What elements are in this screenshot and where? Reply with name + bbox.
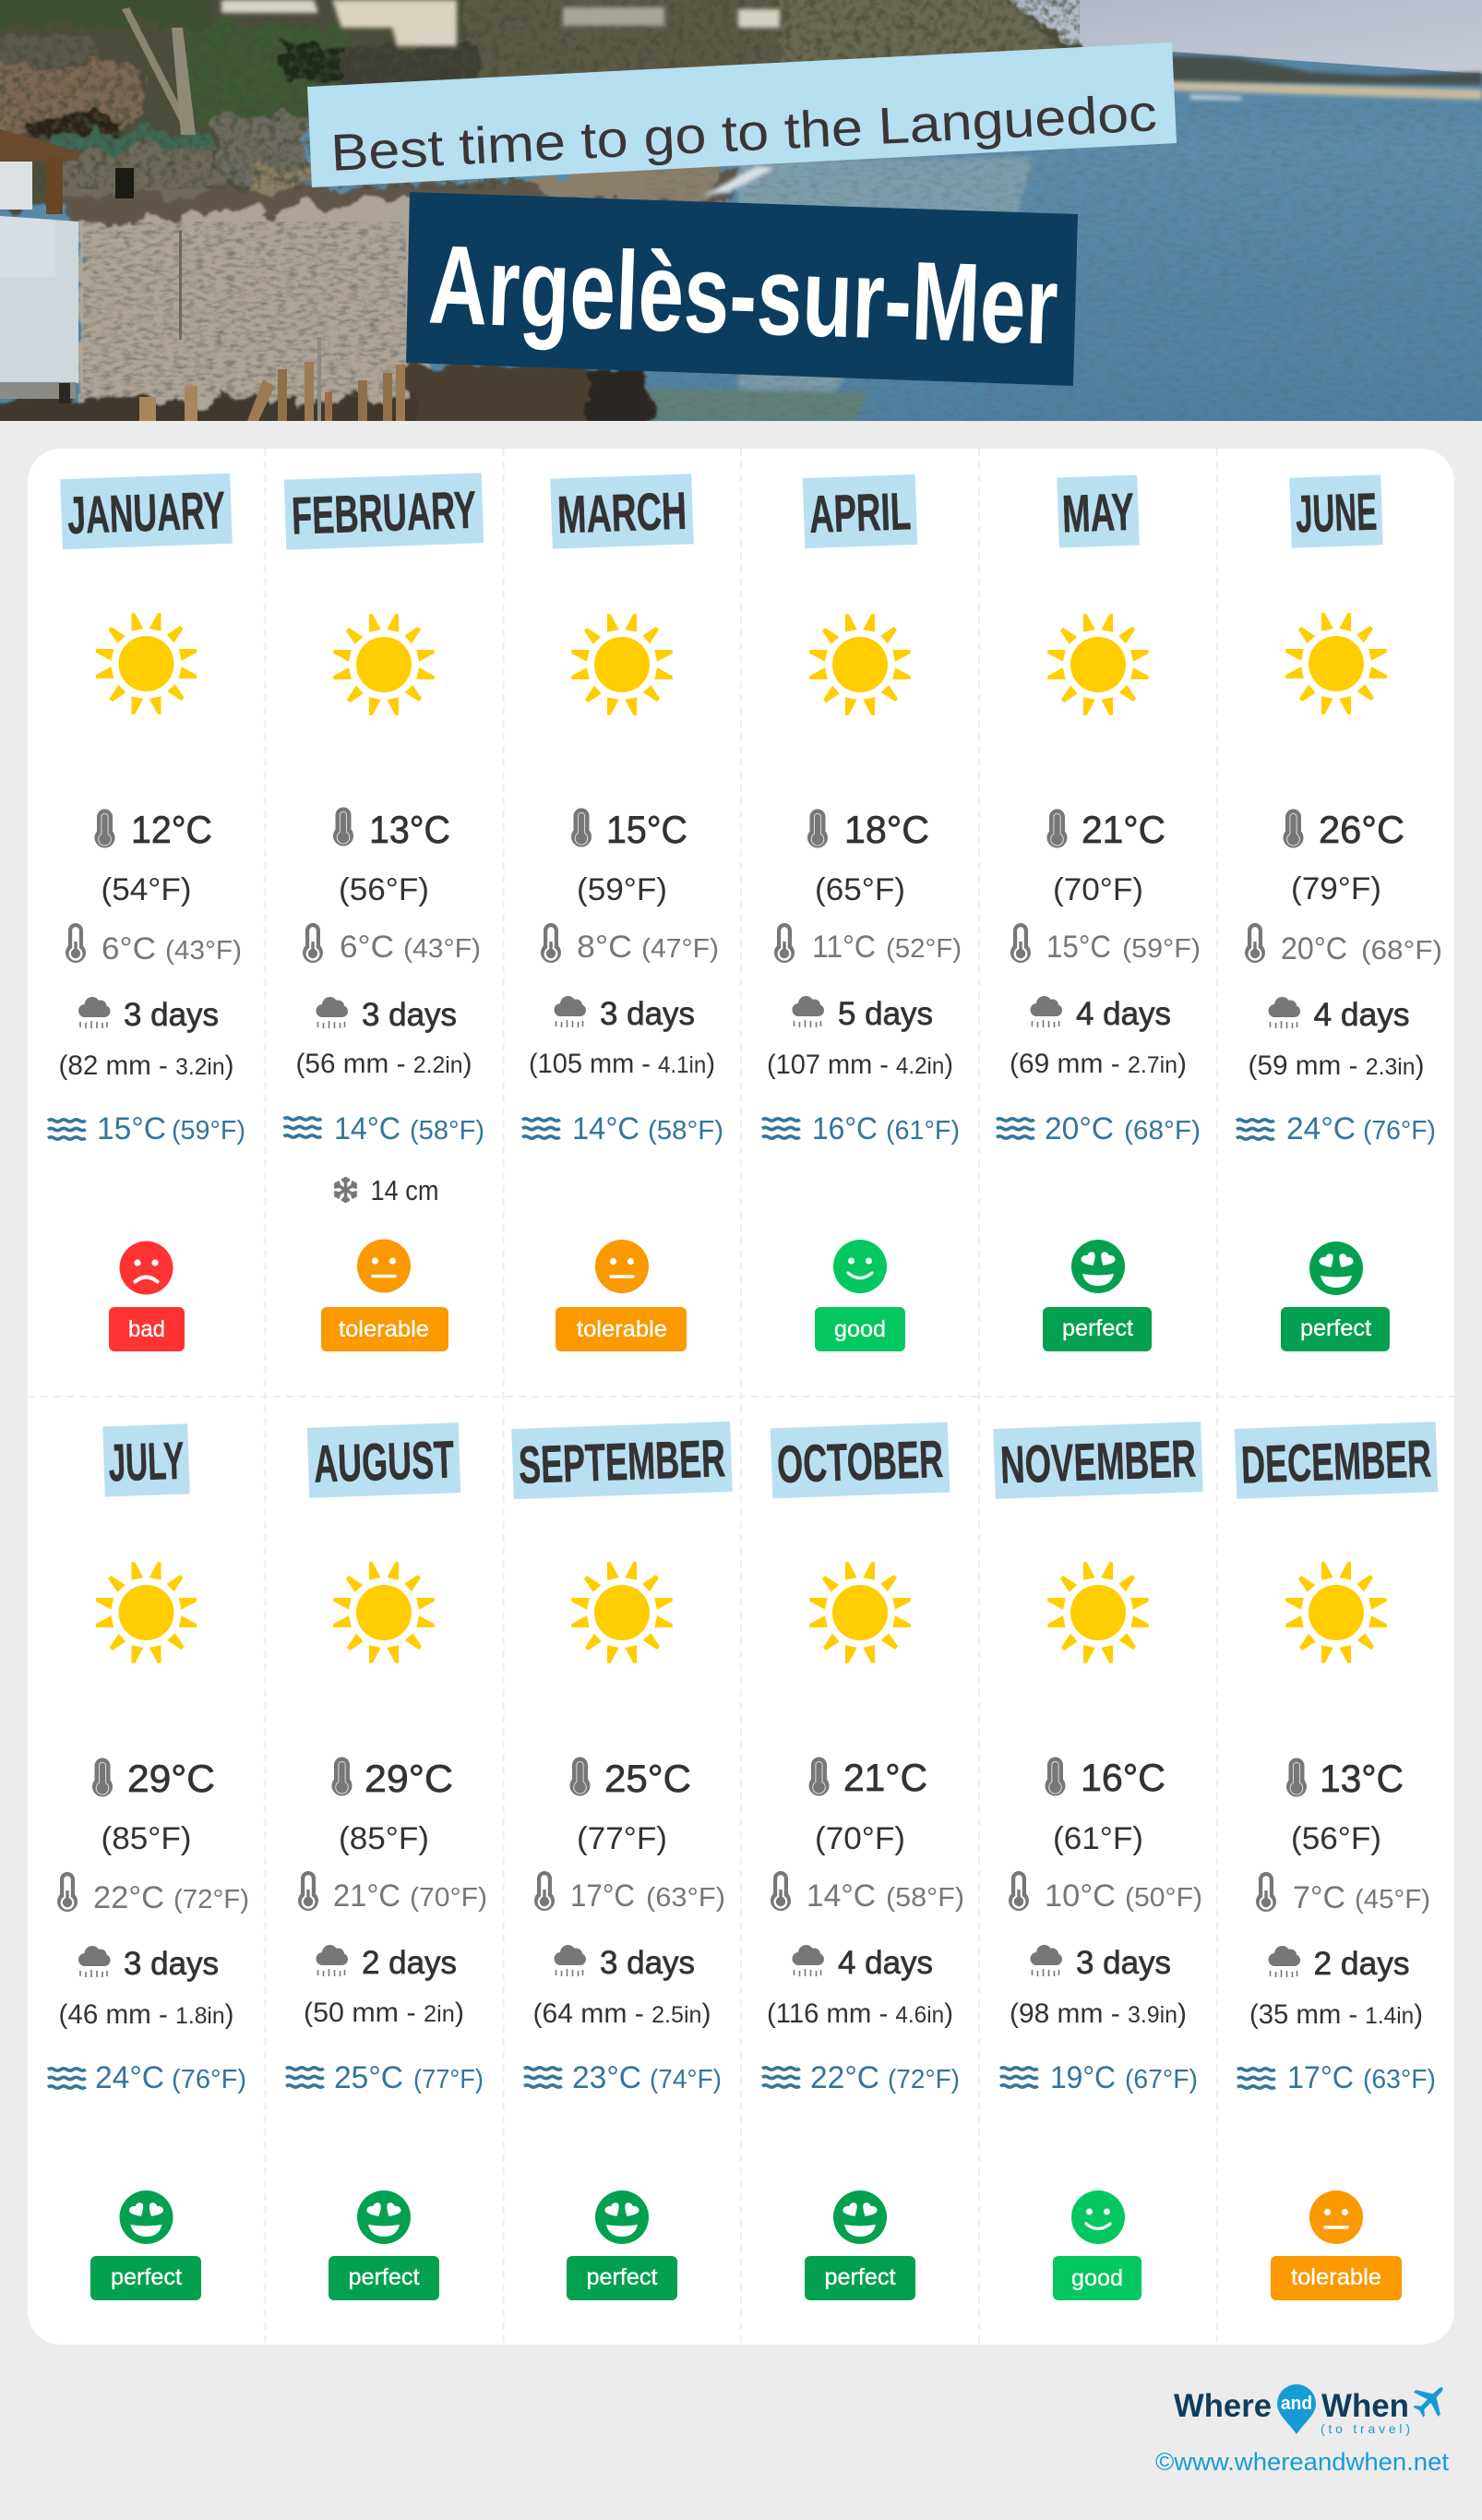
icon: sun [571,614,673,715]
icon: heart-eyes face [357,2190,411,2244]
low temperature: (58°F) [886,1883,964,1913]
logo: Where and When: (to travel) [1321,2421,1410,2436]
rain days: 2 days [1314,1946,1410,1982]
rating: perfect: perfect [587,2264,658,2290]
logo: Where and When: When [1321,2388,1409,2424]
rainfall: (69 mm - 2.7in) [1010,1049,1187,1079]
low temperature: 7°C [1293,1880,1345,1915]
month: June [1237,474,1442,1351]
month label [102,1423,190,1497]
low temperature: 6°C [102,931,156,966]
icon: heart-eyes face [595,2190,649,2244]
rainfall: (56 mm - 2.2in) [295,1049,472,1079]
city name banner: Argelès-sur-Mer [426,221,1060,368]
low temperature: (50°F) [1125,1883,1202,1913]
high temperature Fahrenheit: (56°F) [339,872,429,907]
sea temperature [334,1111,484,1146]
high temperature Fahrenheit: (61°F) [1053,1821,1143,1856]
rating: perfect [1043,1307,1152,1351]
icon: low thermometer [1256,1872,1276,1912]
icon: heart-eyes face [120,2190,173,2244]
low temperature: 11°C [812,930,876,965]
icon: low thermometer [1009,1871,1029,1911]
icon: sun [1285,1562,1387,1663]
rainfall: (98 mm - 3.9in) [1010,1998,1187,2029]
month: September [511,1422,733,2300]
high temperature: 25°C [604,1757,691,1800]
month label [511,1422,733,1499]
sea temperature [812,1111,960,1146]
icon: thermometer [94,809,114,847]
high temperature Fahrenheit: (65°F) [815,872,905,907]
icon: rain cloud [78,1946,111,1977]
low temperature: (72°F) [173,1885,249,1914]
icon: rain cloud [316,997,348,1028]
icon: rain cloud [1268,997,1300,1028]
month: March [522,474,723,1351]
icon: rain cloud [554,1945,586,1976]
sea temperature: (67°F) [1125,2065,1198,2094]
high temperature Fahrenheit: (54°F) [102,872,192,907]
month label: MARCH [556,482,687,545]
rating: perfect [329,2256,439,2300]
sea temperature [95,2060,246,2095]
title banner: Best time to go to the Languedoc [329,83,1158,182]
icon: rain cloud [1030,1945,1062,1976]
low temperature: (43°F) [403,934,481,964]
rating: tolerable: tolerable [339,1316,429,1342]
low temperature: (43°F) [165,936,242,966]
icon: waves [762,2068,800,2087]
icon: heart-eyes face [833,2190,887,2244]
icon: thermometer [1286,1758,1307,1796]
rain days: 3 days [600,996,695,1032]
icon: neutral face [595,1240,649,1293]
icon: thermometer [1046,809,1067,847]
rating: bad [109,1307,185,1351]
icon: waves [1237,1120,1274,1139]
sea temperature: (58°F) [410,1116,484,1146]
icon: smiling face [833,1240,887,1293]
low temperature [1293,1880,1430,1915]
low temperature: 8°C [577,930,632,965]
high temperature Fahrenheit: (56°F) [1291,1821,1381,1856]
icon: plane [1406,2376,1454,2424]
low temperature [333,1878,487,1914]
low temperature [570,1878,725,1914]
logo: Where and When [1174,2376,1454,2436]
rain days: 4 days [1314,997,1410,1033]
rainfall: (50 mm - 2in) [304,1998,464,2028]
rainfall: (107 mm - 4.2in) [767,1050,953,1080]
sea temperature [1045,1111,1201,1146]
icon: low thermometer [303,923,323,963]
icon: thermometer [332,1758,353,1795]
rainfall: (46 mm - 1.8in) [59,1999,234,2030]
month: October [762,1422,964,2300]
icon: waves [524,2068,562,2087]
month label: AUGUST [313,1430,455,1494]
sea temperature [1287,2060,1436,2095]
icon: waves [48,2069,86,2088]
icon: thermometer [1045,1758,1065,1795]
rainfall: (59 mm - 2.3in) [1248,1050,1425,1081]
high temperature Fahrenheit: (70°F) [815,1821,905,1856]
rating: tolerable [556,1307,687,1351]
sea temperature: (76°F) [1363,1116,1436,1146]
high temperature: 18°C [844,808,929,851]
rating: bad: bad [128,1316,165,1342]
sea temperature: 22°C [810,2060,879,2095]
icon: thermometer [92,1758,113,1796]
icon: low thermometer [771,1871,791,1911]
low temperature: 15°C [1046,930,1111,965]
month label [1057,475,1140,547]
month label: MAY [1061,483,1135,544]
low temperature: 10°C [1045,1878,1116,1914]
icon: waves [1237,2069,1275,2088]
month: July [48,1423,249,2300]
sea temperature: 23°C [572,2060,641,2095]
sea temperature [810,2060,960,2095]
icon: waves [762,1119,800,1138]
icon: low thermometer [774,923,795,963]
month label [550,474,694,549]
high temperature: 16°C [1081,1756,1165,1799]
city name banner [406,192,1078,386]
icon: sun [1285,613,1387,714]
rainfall: (35 mm - 1.4in) [1249,1999,1423,2030]
rain days: 3 days [362,997,457,1033]
low temperature: 21°C [333,1878,400,1914]
low temperature [102,931,242,966]
rating: tolerable: tolerable [1291,2264,1381,2290]
title banner [307,42,1177,187]
low temperature: 22°C [93,1880,164,1915]
rating: perfect [90,2256,201,2300]
icon: thermometer [808,1758,829,1795]
month label: APRIL [808,482,912,545]
sea temperature: 19°C [1050,2060,1116,2095]
sea temperature: 14°C [334,1111,400,1146]
rain days: 5 days [838,996,933,1032]
icon: rain cloud [1030,996,1062,1027]
rainfall: (116 mm - 4.6in) [767,1998,953,2029]
high temperature: 29°C [127,1757,215,1800]
rain days: 3 days [1076,1945,1171,1981]
icon: sun [1047,614,1149,715]
sea temperature: 25°C [334,2060,403,2095]
icon: low thermometer [298,1871,318,1911]
rating: perfect: perfect [825,2264,896,2290]
month label [803,474,917,548]
icon: neutral face [357,1239,411,1292]
rating: perfect: perfect [349,2264,420,2290]
month: May [997,475,1201,1351]
low temperature: (52°F) [886,934,962,964]
sea temperature: 20°C [1045,1111,1114,1146]
low temperature: 14°C [807,1878,876,1914]
high temperature: 12°C [131,808,212,851]
icon: neutral face [1309,2190,1363,2244]
low temperature [812,930,962,965]
icon: rain cloud [316,1945,348,1976]
month label: JULY [107,1432,185,1493]
sea temperature: 17°C [1287,2060,1354,2095]
rating: perfect: perfect [1062,1315,1133,1341]
sea temperature: (77°F) [413,2065,484,2094]
high temperature Fahrenheit: (59°F) [577,872,667,907]
low temperature [807,1878,964,1914]
icon: sun [333,614,435,715]
sea temperature: 24°C [1286,1111,1356,1146]
icon: smiling face [1071,2190,1125,2244]
logo: Where and When: Where [1174,2388,1272,2424]
high temperature Fahrenheit: (77°F) [577,1821,667,1856]
low temperature: 20°C [1281,931,1347,966]
month label: JUNE [1295,482,1378,545]
icon: thermometer [807,809,828,847]
month label [284,473,484,550]
low temperature: (70°F) [410,1883,487,1913]
rating: good: good [1071,2265,1123,2291]
rainfall: (105 mm - 4.1in) [529,1049,715,1079]
icon: rain cloud [78,997,111,1028]
low temperature: (68°F) [1361,936,1442,966]
sea temperature: (72°F) [888,2065,960,2094]
rainfall: (64 mm - 2.5in) [533,1998,711,2029]
rain days: 4 days [838,1945,933,1981]
low temperature [577,930,719,965]
icon: low thermometer [1245,923,1265,963]
rating: tolerable [1271,2256,1402,2300]
rating: tolerable [321,1307,448,1351]
low temperature [93,1880,249,1915]
low temperature [1281,931,1442,966]
icon: waves [997,1119,1034,1138]
header photo: beach and sea [0,0,1482,462]
rating: perfect [805,2256,915,2300]
high temperature: 21°C [843,1756,927,1799]
sea temperature: (59°F) [172,1116,245,1146]
icon: heart-eyes face [1309,1242,1363,1295]
icon: heart-eyes face [1071,1240,1125,1293]
sea temperature [1050,2060,1198,2095]
high temperature: 29°C [365,1757,453,1800]
rainfall: (82 mm - 3.2in) [59,1050,234,1081]
month label [1289,474,1383,548]
rain days: 4 days [1076,996,1171,1032]
low temperature: (47°F) [641,934,719,964]
high temperature: 15°C [606,808,687,851]
high temperature: 13°C [1320,1757,1404,1800]
icon: low thermometer [57,1872,78,1912]
sea temperature: (76°F) [172,2065,246,2094]
icon: thermometer [571,809,592,846]
low temperature: 17°C [570,1878,635,1914]
rating: perfect: perfect [111,2264,182,2290]
icon: snowflake [332,1177,359,1203]
icon: low thermometer [66,923,86,963]
high temperature: 21°C [1082,808,1165,851]
month label [993,1422,1203,1499]
icon: sad face [120,1241,173,1294]
icon: thermometer [333,807,353,846]
rain days: 3 days [124,1946,219,1982]
rain days: 3 days [124,997,219,1033]
icon: thermometer [1283,809,1303,847]
rating: good [815,1307,905,1351]
sea temperature: 16°C [812,1111,878,1146]
icon: waves [48,1120,86,1139]
panel: monthly calendar card [28,449,1454,2345]
month: February [284,473,484,1351]
icon: low thermometer [534,1871,555,1911]
sea temperature [97,1111,245,1146]
icon: sun [96,613,197,714]
icon: sun [96,1562,197,1663]
low temperature: 6°C [340,930,394,965]
high temperature Fahrenheit: (79°F) [1291,871,1381,906]
icon: waves [286,2068,324,2087]
icon: rain cloud [792,996,824,1027]
sea temperature [334,2060,484,2095]
sea temperature: (63°F) [1363,2065,1436,2094]
month: January [48,474,245,1351]
high temperature Fahrenheit: (85°F) [102,1821,192,1856]
month label [771,1422,950,1498]
icon: rain cloud [792,1945,824,1976]
low temperature [1046,930,1201,965]
month label: FEBRUARY [291,481,477,546]
rating: good [1053,2256,1141,2300]
month label: NOVEMBER [999,1429,1197,1495]
icon: thermometer [570,1758,591,1795]
icon: waves [522,1119,560,1138]
sea temperature: (68°F) [1124,1116,1201,1146]
sea temperature: (58°F) [648,1116,723,1146]
icon: rain cloud [554,996,586,1027]
rating: tolerable: tolerable [577,1316,667,1342]
icon: waves [1000,2068,1038,2087]
icon: sun [1047,1562,1149,1663]
low temperature: (63°F) [646,1883,725,1913]
icon: rain cloud [1268,1946,1300,1977]
icon: sun [809,1562,911,1663]
sea temperature: 24°C [95,2060,164,2095]
month label [60,474,233,549]
month label [307,1422,460,1498]
month label: OCTOBER [776,1430,944,1494]
snowfall: 14 cm [371,1174,439,1206]
sea temperature: (61°F) [886,1116,960,1146]
high temperature Fahrenheit: (85°F) [339,1821,429,1856]
low temperature [340,930,481,965]
icon: map pin [1277,2384,1316,2434]
sea temperature [1286,1111,1436,1146]
icon: sun [571,1562,673,1663]
month: November [993,1422,1203,2300]
month: April [762,474,962,1351]
rating: good: good [834,1316,886,1342]
rating: perfect [567,2256,677,2300]
month: December [1235,1422,1438,2300]
icon: sun [333,1562,435,1663]
sea temperature: 14°C [572,1111,639,1146]
month label: JANUARY [66,481,226,546]
rating: perfect: perfect [1300,1315,1371,1341]
icon: low thermometer [541,923,561,963]
icon: sun [809,614,911,715]
month: August [286,1422,487,2300]
rain days: 2 days [362,1945,457,1981]
rating: perfect [1281,1307,1390,1351]
low temperature: (45°F) [1355,1885,1430,1914]
low temperature [1045,1878,1202,1914]
high temperature Fahrenheit: (70°F) [1053,872,1143,907]
icon: low thermometer [1010,923,1031,963]
sea temperature [572,2060,722,2095]
high temperature: 13°C [369,808,450,851]
low temperature: (59°F) [1122,934,1201,964]
month label: SEPTEMBER [518,1429,726,1495]
sea temperature: 15°C [97,1111,166,1146]
high temperature: 26°C [1319,808,1404,851]
icon: waves [284,1118,321,1137]
sea temperature: (74°F) [650,2065,722,2094]
icon: map pin: and [1281,2394,1312,2414]
rain days: 3 days [600,1945,695,1981]
sea temperature [572,1111,723,1146]
website credit: ©www.whereandwhen.net [1155,2448,1449,2476]
